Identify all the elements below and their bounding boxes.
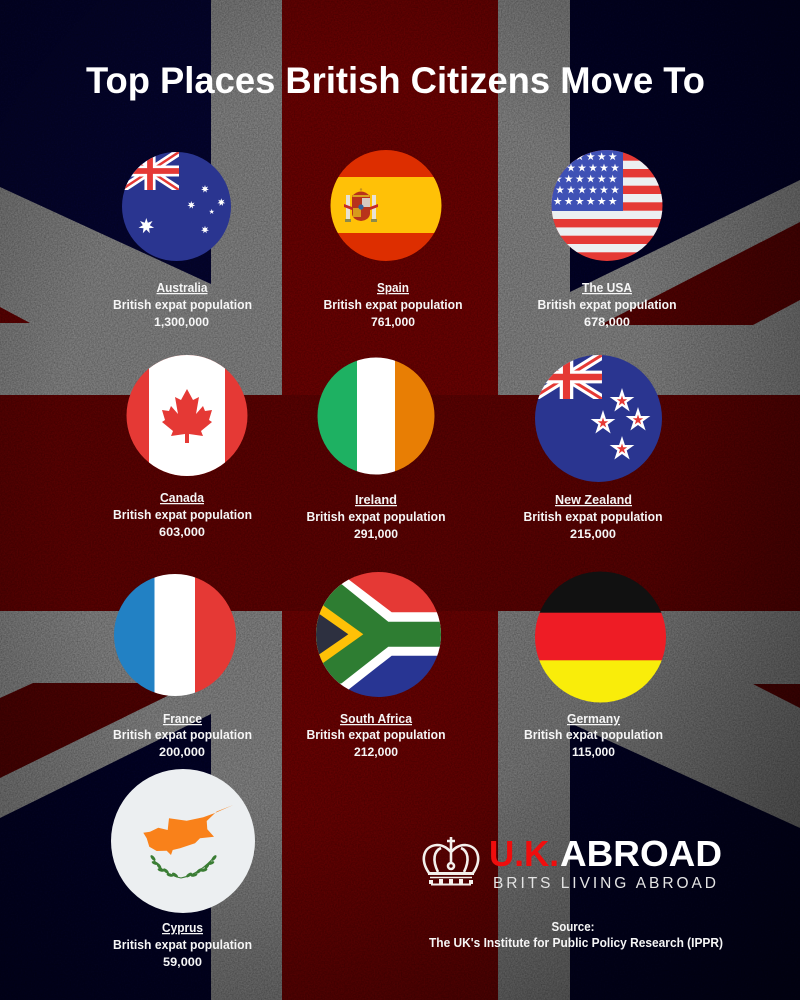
logo tagline: BRITS LIVING ABROAD (493, 875, 716, 892)
label: Canada: British expat population (113, 508, 252, 522)
source note (429, 920, 723, 950)
logo text: U.K.: U.K. (489, 833, 559, 874)
label: South Africa (306, 712, 446, 759)
label: Cyprus: Cyprus (162, 921, 203, 935)
label: Canada (113, 491, 252, 539)
label: South Africa: South Africa (340, 712, 413, 726)
label: New Zealand: 215,000 (570, 529, 616, 541)
icon: Canada flag (125, 353, 250, 478)
label: Cyprus: British expat population (113, 938, 252, 952)
label: Australia (113, 281, 252, 329)
label: South Africa: 212,000 (354, 747, 398, 759)
icon: Spain flag (330, 150, 442, 262)
logo text: ABROAD: ABROAD (560, 833, 722, 874)
label: Canada: Canada (160, 491, 205, 505)
label: The USA (538, 281, 676, 329)
icon: South Africa flag (316, 572, 441, 697)
label: Germany: Germany (567, 712, 620, 726)
icon: New Zealand flag (531, 353, 665, 485)
label: Australia: British expat population (113, 298, 252, 312)
label: Spain (324, 281, 462, 329)
label: The USA: 678,000 (584, 317, 630, 329)
label: France: France (163, 712, 202, 726)
logo: U.K. Abroad (424, 833, 722, 892)
label: Ireland: 291,000 (354, 529, 398, 541)
source note: Source: (552, 920, 594, 934)
label: France (113, 712, 252, 759)
label: New Zealand (524, 493, 662, 541)
icon: Ireland flag (315, 355, 437, 477)
icon: Cyprus flag (111, 769, 255, 913)
label: Germany: 115,000 (572, 747, 615, 759)
label: The USA: British expat population (538, 298, 676, 312)
label: New Zealand: New Zealand (555, 493, 632, 507)
title: Top Places British Citizens Move To (86, 60, 705, 101)
icon: Australia flag (122, 152, 231, 261)
label: France: British expat population (113, 728, 252, 742)
label: Ireland (306, 493, 446, 541)
label: Spain: 761,000 (371, 317, 415, 329)
icon: Germany flag (533, 569, 669, 705)
label: Germany (524, 712, 663, 759)
label: Spain: Spain (377, 281, 409, 295)
label: Australia: Australia (156, 281, 208, 295)
label: South Africa: British expat population (306, 728, 446, 742)
label: Australia: 1,300,000 (154, 317, 209, 329)
label: The USA: The USA (582, 281, 632, 295)
source note: The UK's Institute for Public Policy Research (IPPR) (429, 936, 723, 950)
label: Cyprus (113, 921, 252, 969)
label: Ireland: Ireland (355, 493, 397, 507)
label: France: 200,000 (159, 747, 205, 759)
label: Ireland: British expat population (306, 510, 446, 524)
label: Spain: British expat population (324, 298, 462, 312)
icon: crown (424, 837, 478, 884)
label: Canada: 603,000 (159, 527, 205, 539)
label: New Zealand: British expat population (524, 510, 662, 524)
label: Cyprus: 59,000 (163, 957, 202, 969)
label: Germany: British expat population (524, 728, 663, 742)
icon: France flag (112, 572, 238, 698)
icon: USA flag (550, 150, 665, 265)
